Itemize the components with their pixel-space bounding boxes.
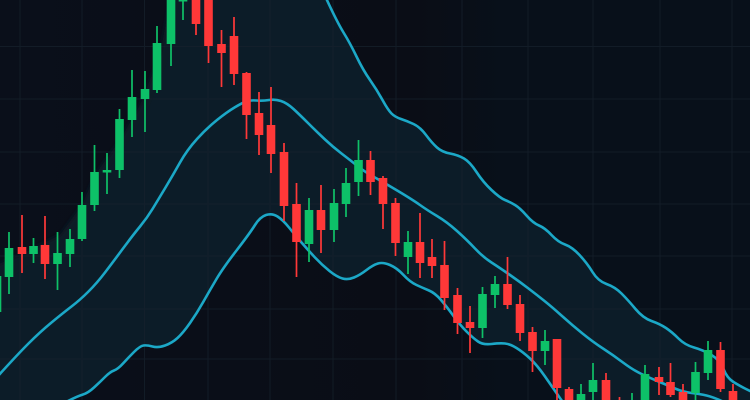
lower band line	[68, 214, 562, 400]
band fill soft left edge	[0, 0, 230, 400]
upper band line	[326, 0, 750, 392]
middle band line	[0, 100, 724, 400]
